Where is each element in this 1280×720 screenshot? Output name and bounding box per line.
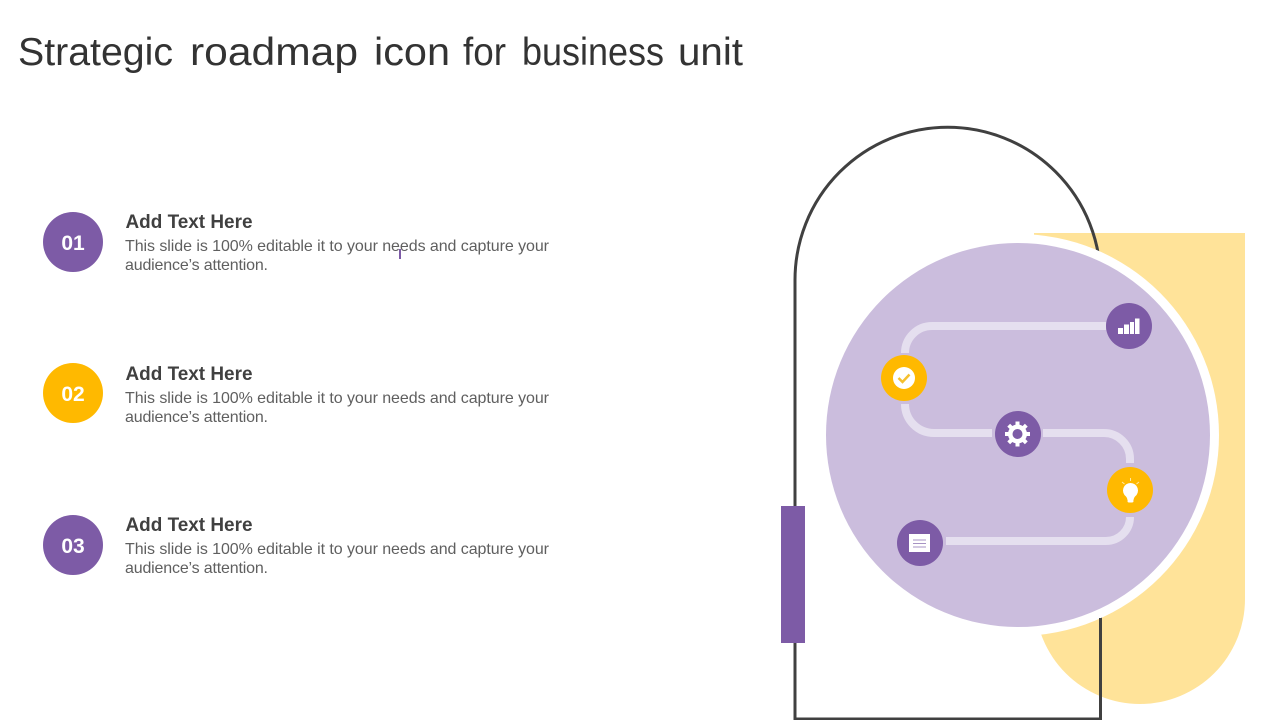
item 02 body text	[125, 390, 550, 426]
item 03 body text	[125, 541, 550, 577]
item 02 heading: Add Text Here	[126, 364, 252, 385]
winding road	[905, 326, 1130, 541]
arch outline	[795, 127, 1100, 719]
arch right segment over ring	[1099, 618, 1102, 719]
number badge 03: 03	[61, 535, 85, 558]
item 02 body text: audience’s attention.	[125, 409, 268, 426]
icon: bar chart node	[1106, 303, 1152, 349]
title: icon	[374, 31, 450, 74]
icon: gear node	[995, 411, 1041, 457]
list item 01	[43, 212, 550, 274]
icon: light bulb node	[1107, 467, 1153, 513]
item 01 body text	[125, 238, 550, 274]
number badge 02	[43, 363, 103, 423]
number badge 03	[43, 515, 103, 575]
item 01 body text: This slide is 100% editable it to your needs and capture your	[125, 238, 550, 255]
title: unit	[678, 31, 743, 74]
list item 03	[43, 515, 550, 577]
title: business	[522, 31, 664, 74]
number badge 01: 01	[61, 232, 85, 255]
text cursor mark	[399, 249, 401, 259]
item 02 body text: This slide is 100% editable it to your needs and capture your	[125, 390, 550, 407]
purple tab	[781, 506, 805, 643]
title	[18, 31, 743, 74]
list item 02	[43, 363, 550, 426]
lilac circle	[826, 243, 1210, 627]
white ring behind circle	[817, 234, 1219, 636]
item 01 body text: audience’s attention.	[125, 257, 268, 274]
number badge 02: 02	[61, 383, 85, 406]
item 03 body text: audience’s attention.	[125, 560, 268, 577]
title: Strategic	[18, 31, 173, 74]
item 03 body text: This slide is 100% editable it to your needs and capture your	[125, 541, 550, 558]
title: roadmap	[190, 31, 358, 74]
yellow backdrop shape	[1034, 233, 1245, 704]
number badge 01	[43, 212, 103, 272]
roadmap illustration	[781, 127, 1245, 719]
item 03 heading: Add Text Here	[126, 515, 252, 536]
item 01 heading: Add Text Here	[126, 212, 252, 233]
icon: document node	[897, 520, 943, 566]
title: for	[463, 31, 506, 74]
icon: check node	[881, 355, 927, 401]
